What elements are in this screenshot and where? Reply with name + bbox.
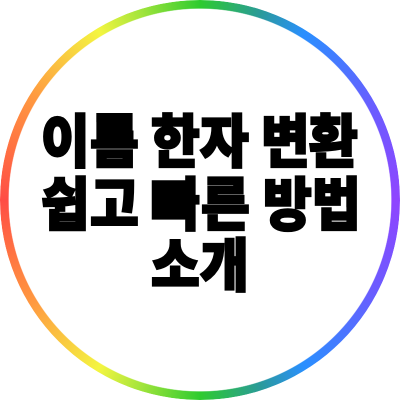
- title line 1: 이름 한자 변환: [41, 110, 358, 174]
- title line 3: 소개: [151, 234, 249, 298]
- title line 2: 쉽고 빠른 방법: [41, 173, 361, 237]
